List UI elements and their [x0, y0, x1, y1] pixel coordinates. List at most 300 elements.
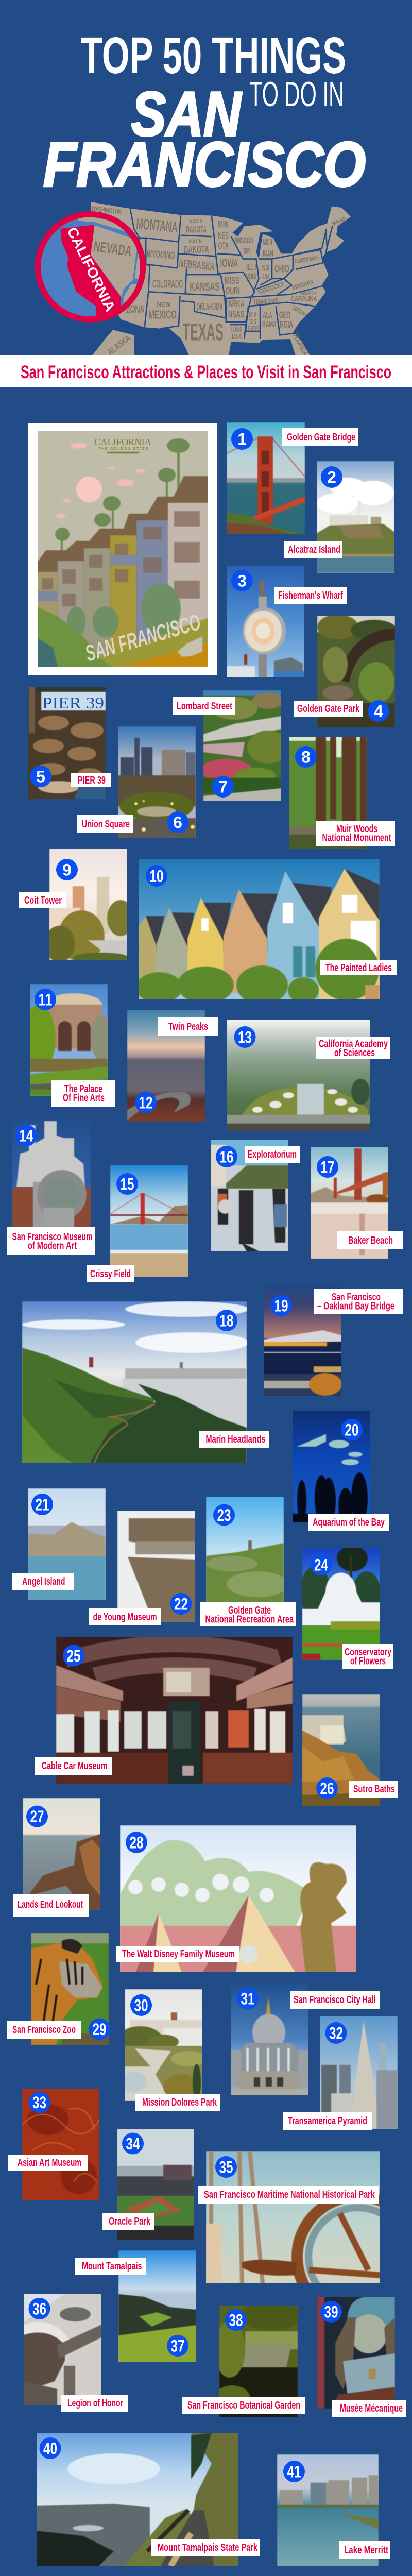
- state names: TEXAS: [183, 319, 224, 346]
- state names: ARKA: [228, 298, 244, 309]
- attraction 38: San Francisco Botanical Garden: [182, 2301, 305, 2417]
- badge 2: 2: [327, 468, 336, 486]
- label: Angel Island: Angel Island: [22, 1576, 65, 1587]
- attraction 17: Baker Beach: [311, 1147, 403, 1259]
- badge 24: 24: [314, 1556, 328, 1574]
- badge 34: 34: [126, 2134, 140, 2153]
- label: Mount Tamalpais State Park: Mount Tamalpais State Park: [158, 2542, 258, 2553]
- label: Transamerica Pyramid: [283, 2112, 372, 2130]
- badge 18: [216, 1310, 237, 1331]
- badge 19: [270, 1295, 292, 1316]
- label: Lands End Lookout: [13, 1894, 89, 1917]
- state borders: [130, 208, 332, 339]
- badge 33: [29, 2092, 50, 2113]
- poster: California the golden state: THE GOLDEN STATE: [98, 447, 148, 451]
- photo: Lake Merritt: [277, 2454, 379, 2566]
- photo: Conservatory of Flowers: [302, 1548, 380, 1660]
- state names: MICH: [263, 238, 272, 247]
- badge 6: [167, 811, 188, 833]
- photo: Mount Tamalpais: [118, 2250, 196, 2362]
- badge 30: 30: [134, 1996, 148, 2014]
- attraction 36: Legion of Honor: [24, 2294, 128, 2412]
- contiguous states: [91, 202, 351, 355]
- label: Twin Peaks: Twin Peaks: [168, 1021, 208, 1032]
- label: Conservatory of Flowers: Conservatory: [345, 1647, 392, 1658]
- state names: LOUIS: [231, 326, 242, 333]
- attraction 22: de Young Museum: [89, 1511, 195, 1625]
- photo: Golden Gate National Recreation Area: [206, 1497, 284, 1602]
- badge 26: 26: [320, 1780, 334, 1798]
- state names: SIN: [243, 246, 250, 256]
- attraction 35: San Francisco Maritime National Historical Park: [198, 2151, 412, 2318]
- label: The Walt Disney Family Museum: The Walt Disney Family Museum: [122, 1948, 235, 1960]
- state names: NEBRASKA: [178, 257, 215, 273]
- state names: NSAS: [228, 309, 244, 319]
- badge 15: [116, 1173, 138, 1195]
- badge 17: 17: [320, 1158, 335, 1177]
- label: Union Square: Union Square: [82, 819, 130, 830]
- photo: Union Square: [118, 726, 196, 838]
- badge 35: 35: [219, 2158, 233, 2176]
- attraction 15: Crissy Field: [87, 1165, 188, 1282]
- label: Golden Gate National Recreation Area: [200, 1602, 296, 1626]
- photo: Lands End Lookout: [23, 1798, 100, 1910]
- state names: ANA: [262, 273, 269, 281]
- label: Lake Merritt: [339, 2541, 390, 2559]
- label: Mount Tamalpais: Mount Tamalpais: [82, 2261, 142, 2272]
- photo: Marin Headlands: [22, 1301, 247, 1463]
- poster: California the golden state: CALIFORNIA: [94, 437, 151, 447]
- badge 1: [231, 428, 253, 450]
- label: Angel Island: [12, 1573, 74, 1590]
- label: Union Square: [77, 815, 133, 833]
- badge 3: [231, 570, 253, 591]
- label: Transamerica Pyramid: Transamerica Pyramid: [288, 2115, 367, 2127]
- badge 41: [283, 2461, 305, 2482]
- badge 10: 10: [149, 867, 164, 885]
- label: Baker Beach: Baker Beach: [348, 1235, 393, 1246]
- badge 6: 6: [173, 813, 182, 832]
- badge 17: [317, 1156, 338, 1178]
- badge 31: 31: [241, 1990, 254, 2008]
- label: Oracle Park: Oracle Park: [109, 2216, 151, 2227]
- photo: Aquarium of the Bay: [293, 1411, 370, 1522]
- label: Fisherman's Wharf: [274, 587, 347, 604]
- badge 1: 1: [237, 430, 247, 448]
- state names: CAROLINA: [291, 295, 317, 302]
- attraction 37: Mount Tamalpais: [75, 2250, 196, 2362]
- label: Marin Headlands: Marin Headlands: [206, 1434, 266, 1445]
- state names: SIPPI: [248, 325, 259, 332]
- label: The Palace Of Fine Arts: The Palace: [64, 1083, 102, 1095]
- state names: NORTH: [190, 218, 203, 225]
- state names: CAROLINA: [291, 305, 307, 318]
- badge 16: 16: [219, 1148, 234, 1166]
- photo: San Francisco City Hall: [231, 1985, 308, 2095]
- state names: INDI: [262, 264, 269, 273]
- photo: Golden Gate Park: [317, 616, 395, 727]
- label: Aquarium of the Bay: [308, 1514, 389, 1531]
- attraction 34: Oracle Park: [102, 2129, 194, 2240]
- badge 5: 5: [36, 768, 45, 786]
- attraction 4: Golden Gate Park: [294, 615, 397, 727]
- badge 13: 13: [238, 1028, 252, 1047]
- state names: [91, 205, 348, 357]
- label: Crissy Field: [87, 1265, 134, 1282]
- attraction 19: San Francisco Oakland Bay Bridge: [264, 1284, 403, 1396]
- label: Cable Car Museum: Cable Car Museum: [42, 1760, 108, 1772]
- state names: OTA: [218, 241, 229, 251]
- attraction 29: San Francisco Zoo: [7, 1933, 110, 2045]
- attraction 27: Lands End Lookout: [13, 1798, 100, 1917]
- photo: Muir Woods: [289, 737, 367, 849]
- state names: MEXICO: [148, 308, 177, 321]
- attraction 41: Lake Merritt: [277, 2454, 390, 2566]
- attraction 24: Conservatory of Flowers: [300, 1546, 393, 1669]
- title block: [43, 27, 366, 199]
- badge 41: 41: [287, 2463, 301, 2481]
- label: California Academy of Sciences: [316, 1037, 390, 1059]
- badge 14: 14: [20, 1126, 33, 1145]
- label: Musée Mécanique: [332, 2400, 406, 2417]
- badge 20: 20: [345, 1421, 358, 1439]
- photo: de Young Museum: [117, 1511, 195, 1622]
- state names: DAKOTA: [186, 224, 207, 235]
- badge 10: [146, 865, 167, 887]
- label: Alcatraz Island: [284, 541, 342, 558]
- photo: Alcatraz Island: [317, 461, 394, 573]
- badge 22: 22: [174, 1595, 188, 1614]
- label: San Francisco Museum of Modern Art: San Francisco Museum: [12, 1231, 93, 1243]
- badge 3: 3: [237, 572, 247, 590]
- photo: PIER 39: [28, 687, 106, 799]
- state names: SOUTH: [188, 239, 202, 245]
- badge 8: [295, 746, 317, 768]
- label: Mount Tamalpais State Park: [151, 2539, 260, 2556]
- attraction 8: Muir Woods: [289, 737, 395, 849]
- badge 15: 15: [121, 1175, 134, 1193]
- photo: Mount Tamalpais State Park: [37, 2433, 238, 2566]
- badge 5: [30, 766, 52, 787]
- badge 13: [234, 1026, 255, 1048]
- label: Conservatory of Flowers: of Flowers: [350, 1656, 386, 1667]
- label: Asian Art Museum: Asian Art Museum: [18, 2157, 81, 2168]
- state names: TENNESSEE: [253, 297, 279, 306]
- state names: ZONA: [126, 303, 145, 315]
- photo: Angel Island: [28, 1488, 106, 1600]
- badge 32: 32: [329, 2024, 343, 2042]
- attraction 16: Exploratorium: [211, 1140, 300, 1251]
- attraction 7: Lombard Street: [173, 690, 288, 801]
- label: Sutro Baths: [349, 1781, 398, 1798]
- label: Mount Tamalpais: [75, 2258, 146, 2275]
- state names: BAMA: [262, 319, 277, 329]
- attraction 21: Angel Island: [12, 1488, 106, 1600]
- label: Coit Tower: Coit Tower: [24, 895, 62, 906]
- attraction 32: Transamerica Pyramid: [283, 2016, 398, 2130]
- label: California Academy of Sciences: of Sciences: [334, 1047, 375, 1059]
- badge 37: [167, 2335, 188, 2357]
- label: Golden Gate Park: [294, 701, 363, 717]
- state names: FLORIDA: [291, 332, 310, 357]
- attraction 14: San Francisco Museum of Modern Art: [7, 1120, 95, 1255]
- label: Twin Peaks: [158, 1017, 218, 1036]
- state names: COLORADO: [152, 278, 183, 291]
- state names: KANSAS: [190, 280, 220, 293]
- attraction 39: Musée Mécanique: [317, 2297, 406, 2417]
- badge 4: 4: [374, 702, 383, 720]
- label: PIER 39: PIER 39: [78, 775, 106, 786]
- label: Sutro Baths: Sutro Baths: [353, 1784, 395, 1795]
- state names: ILLI: [246, 263, 256, 272]
- photo: Fisherman's Wharf: [227, 566, 304, 677]
- label: Lake Merritt: Lake Merritt: [344, 2545, 388, 2556]
- label: Crissy Field: Crissy Field: [90, 1268, 131, 1280]
- attraction 25: Cable Car Museum: [35, 1635, 293, 1784]
- badge 27: 27: [30, 1807, 44, 1826]
- state names: MIS: [249, 311, 256, 318]
- label: Alcatraz Island: Alcatraz Island: [288, 544, 340, 555]
- badge 11: [35, 989, 56, 1010]
- state names: SIS: [250, 318, 256, 326]
- photo: Twin Peaks: [127, 1010, 205, 1122]
- label: San Francisco Museum of Modern Art: [7, 1227, 95, 1255]
- badge 19: 19: [274, 1296, 288, 1315]
- subtitle band: [0, 355, 412, 387]
- state names: GEO: [279, 309, 290, 320]
- attraction 26: Sutro Baths: [302, 1694, 398, 1806]
- photo: Sutro Baths: [302, 1694, 380, 1806]
- state names: RGIA: [280, 319, 293, 330]
- photo: Asian Art Museum: [22, 2089, 99, 2200]
- label: Legion of Honor: Legion of Honor: [67, 2398, 123, 2409]
- badge 4: [368, 700, 389, 722]
- label: Baker Beach: [337, 1231, 403, 1249]
- state names: IGAN: [263, 249, 273, 258]
- label: San Francisco City Hall: San Francisco City Hall: [294, 1994, 376, 2006]
- badge 39: [320, 2301, 342, 2323]
- badge 34: [122, 2133, 144, 2155]
- badge 8: 8: [301, 748, 311, 767]
- attraction 40: Mount Tamalpais State Park: [37, 2433, 260, 2566]
- attraction 12: Twin Peaks: [127, 1010, 218, 1122]
- Alaska: [92, 330, 134, 355]
- attraction 30: Mission Dolores Park: [117, 1989, 220, 2111]
- attraction 10: The Painted Ladies: [136, 859, 397, 1005]
- badge 22: [170, 1593, 192, 1615]
- label: San Francisco Botanical Garden: San Francisco Botanical Garden: [187, 2400, 300, 2411]
- badge 40: [39, 2437, 61, 2459]
- label: Lombard Street: [173, 697, 235, 715]
- photo: Lombard Street: [203, 690, 281, 801]
- label: Golden Gate Bridge: Golden Gate Bridge: [287, 432, 355, 443]
- label: California Academy of Sciences: California Academy: [319, 1039, 388, 1050]
- state names: OURI: [226, 285, 239, 296]
- state names: MISS: [225, 275, 239, 286]
- label: Golden Gate Park: Golden Gate Park: [297, 703, 360, 715]
- label: Muir Woods National Monument: [316, 821, 395, 846]
- label: Asian Art Museum: [8, 2155, 88, 2171]
- attraction 33: Asian Art Museum: [8, 2089, 99, 2200]
- photo: Palace of Fine Arts: [30, 984, 108, 1096]
- photo: Baker Beach: [311, 1147, 388, 1259]
- badge 31: [237, 1988, 259, 2009]
- attraction 20: Aquarium of the Bay: [293, 1411, 389, 1531]
- label: San Francisco Botanical Garden: [182, 2397, 305, 2414]
- photo: Legion of Honor: [24, 2294, 101, 2405]
- photo: California Academy of Sciences: [227, 1020, 370, 1131]
- label: Lands End Lookout: Lands End Lookout: [18, 1899, 83, 1910]
- badge 14: [15, 1125, 37, 1146]
- state names: IANA: [232, 333, 242, 341]
- heading: to do in: TO DO IN: [249, 75, 344, 114]
- heading: San: SAN: [131, 79, 242, 149]
- photo: San Francisco Botanical Garden: [219, 2306, 298, 2417]
- badge 9: [56, 859, 78, 880]
- badge 12: 12: [139, 1093, 152, 1112]
- badge 29: 29: [93, 2020, 106, 2039]
- state names: IOWA: [220, 257, 238, 269]
- badge 23: 23: [217, 1506, 231, 1524]
- attraction 28: The Walt Disney Family Museum: [116, 1825, 356, 1972]
- photo: Cable Car Museum: [56, 1637, 293, 1784]
- label: San Francisco Maritime National Historical Park: [198, 2186, 379, 2204]
- state names: NORTH: [301, 291, 317, 296]
- state names: PENNSYLVANIA: [294, 255, 319, 265]
- state names: OKLAHOMA: [197, 301, 223, 313]
- badge 32: [325, 2022, 347, 2044]
- attraction 23: Golden Gate National Recreation Area: [200, 1497, 296, 1626]
- label: Cable Car Museum: [35, 1757, 112, 1775]
- heading: Francisco: FRANCISCO: [43, 129, 366, 199]
- state names: WYOMING: [146, 248, 175, 262]
- label: Golden Gate National Recreation Area: National Recreation Area: [205, 1614, 294, 1625]
- state names: DAKOTA: [184, 244, 209, 256]
- photo: Walt Disney Family Museum: [120, 1825, 356, 1972]
- photo: Coit Tower: [49, 849, 127, 960]
- badge 36: [29, 2298, 50, 2319]
- photo: SFMOMA: [12, 1121, 91, 1227]
- attraction 11: The Palace Of Fine Arts: [23, 984, 115, 1107]
- state names: NEW: [157, 301, 171, 308]
- attraction 1: Golden Gate Bridge: [227, 422, 358, 534]
- label: Golden Gate National Recreation Area: Golden Gate: [228, 1605, 271, 1616]
- badge 26: [316, 1777, 338, 1799]
- label: San Francisco Zoo: [7, 2021, 81, 2039]
- photo: The Painted Ladies: [139, 859, 380, 999]
- photo: Mission Dolores Park: [125, 1989, 202, 2101]
- badge 21: [31, 1494, 53, 1515]
- label: The Palace Of Fine Arts: Of Fine Arts: [63, 1092, 105, 1104]
- label: Mission Dolores Park: [135, 2094, 220, 2111]
- label: San Francisco Museum of Modern Art: of Modern Art: [28, 1241, 77, 1252]
- photo: Crissy Field: [110, 1165, 188, 1277]
- circle callout: California: CALIFORNIA: [64, 225, 118, 314]
- label: San Francisco Oakland Bay Bridge: [314, 1289, 403, 1314]
- label: Coit Tower: [19, 892, 66, 908]
- photo: Exploratorium: [211, 1140, 288, 1251]
- badge 27: [26, 1806, 48, 1827]
- label: Golden Gate Bridge: [282, 428, 358, 446]
- label: Marin Headlands: [199, 1431, 269, 1448]
- photo: Bay Bridge: [264, 1291, 341, 1396]
- photo: Transamerica Pyramid: [320, 2016, 398, 2129]
- badge 28: [126, 1832, 147, 1853]
- attraction 18: Marin Headlands: [22, 1301, 269, 1463]
- badge 38: [225, 2309, 247, 2331]
- badge 18: 18: [219, 1312, 234, 1330]
- state names: VIRGINIA: [291, 278, 315, 292]
- attraction 3: Fisherman's Wharf: [227, 566, 347, 677]
- badge 2: [321, 466, 342, 488]
- badge 25: 25: [67, 1647, 80, 1665]
- label: Lombard Street: Lombard Street: [177, 701, 232, 712]
- label: The Painted Ladies: [320, 960, 397, 975]
- map: USA with California highlighted: [35, 202, 351, 357]
- attraction 9: Coit Tower: [19, 849, 134, 963]
- label: de Young Museum: [89, 1608, 161, 1625]
- badge 20: [341, 1419, 363, 1440]
- badge 7: [212, 776, 234, 798]
- badge 38: 38: [229, 2311, 243, 2330]
- badge 25: [63, 1645, 84, 1666]
- label: The Walt Disney Family Museum: [116, 1946, 239, 1962]
- label: de Young Museum: de Young Museum: [93, 1612, 157, 1623]
- label: Mission Dolores Park: Mission Dolores Park: [142, 2097, 217, 2108]
- attraction 31: San Francisco City Hall: [231, 1984, 380, 2095]
- badge 37: 37: [171, 2337, 184, 2355]
- label: Fisherman's Wharf: Fisherman's Wharf: [278, 590, 343, 601]
- state names: WISCON: [235, 236, 253, 245]
- badge 33: 33: [32, 2093, 46, 2112]
- label: Aquarium of the Bay: Aquarium of the Bay: [313, 1517, 385, 1528]
- badge 23: [213, 1504, 235, 1526]
- badge 21: 21: [35, 1495, 49, 1514]
- label: Exploratorium: Exploratorium: [248, 1149, 297, 1160]
- label: San Francisco Zoo: San Francisco Zoo: [12, 2024, 76, 2036]
- label: PIER 39: [71, 773, 111, 787]
- badge 16: [216, 1146, 237, 1167]
- photo: PIER 39: PIER 39: [42, 693, 104, 712]
- photo: San Francisco Zoo: [31, 1933, 109, 2045]
- attraction 2: Alcatraz Island: [284, 461, 394, 573]
- circle callout: California: NEVADA: [93, 238, 133, 260]
- label: San Francisco City Hall: [290, 1991, 380, 2009]
- state names: MAINE: [331, 215, 348, 228]
- label: Legion of Honor: [61, 2395, 128, 2412]
- state names: NES: [218, 230, 229, 241]
- badge 12: [135, 1092, 157, 1113]
- label: The Palace Of Fine Arts: [52, 1080, 115, 1107]
- circle callout: California: [35, 211, 147, 323]
- badge 40: 40: [43, 2439, 57, 2458]
- state names: MIN: [218, 218, 229, 229]
- state names: OHIO: [274, 264, 289, 275]
- attraction 6: Union Square: [77, 726, 196, 838]
- photo: Maritime Park ship wheel: [206, 2151, 380, 2283]
- label: Oracle Park: [102, 2213, 154, 2230]
- photo: Musée Mécanique: [317, 2297, 395, 2409]
- attraction 13: California Academy of Sciences: [227, 1020, 390, 1131]
- badge 39: 39: [324, 2303, 338, 2321]
- badge 35: [215, 2156, 237, 2178]
- label: Exploratorium: [245, 1146, 300, 1163]
- state names: ALA: [263, 310, 272, 320]
- badge 11: 11: [38, 990, 53, 1009]
- badge 29: [89, 2019, 110, 2040]
- state names: KENTUCKY: [257, 280, 285, 296]
- state names: WASHINGTON: [91, 205, 122, 215]
